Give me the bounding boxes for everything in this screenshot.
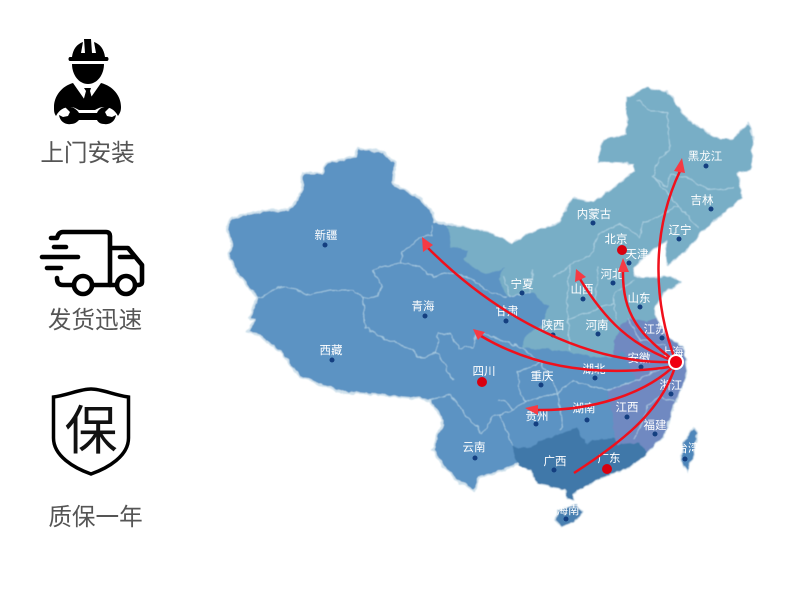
map: province labels: 浙江 [660, 379, 683, 392]
map: province labels: 辽宁 [668, 223, 692, 237]
icon: worker with wrench [54, 39, 121, 124]
arrow: to Gansu and Xinjiang [422, 237, 676, 362]
map: province labels: 台湾 [676, 441, 700, 455]
map: Taiwan [680, 428, 698, 472]
map of China [226, 88, 753, 527]
map: eastern provinces [608, 318, 687, 453]
arrow: to Heilongjiang [658, 158, 685, 362]
arrow: to Guangdong and Guangxi [574, 364, 676, 473]
map: province labels: 安徽 [628, 351, 651, 365]
map: province labels: 陕西 [542, 318, 564, 332]
map: province labels: 山西 [570, 283, 594, 296]
map: province labels: 西藏 [320, 344, 343, 357]
map: northern provinces [447, 88, 753, 358]
heading: 质保一年: 质保一年 [48, 504, 143, 531]
map: province labels: 吉林 [690, 193, 714, 207]
map: province labels [314, 150, 723, 517]
map: province capital dots [322, 164, 714, 522]
map: province labels: 河北 [600, 268, 624, 281]
map: province labels: 湖北 [582, 362, 606, 376]
map: province labels: 贵州 [526, 410, 548, 423]
map: province labels: 宁夏 [510, 277, 534, 291]
map: province labels: 湖南 [572, 401, 596, 415]
map: province labels: 青海 [412, 299, 435, 313]
map: province labels: 广东 [598, 452, 620, 465]
map: land regions [226, 88, 753, 527]
map: province labels: 内蒙古 [577, 207, 611, 221]
map: Shanghai origin hub [668, 354, 684, 370]
heading: 上门安装: 上门安装 [40, 140, 135, 167]
map: province labels: 新疆 [314, 228, 338, 242]
map: province labels: 江西 [616, 401, 638, 414]
map: province labels: 重庆 [530, 369, 554, 383]
map: province borders [257, 100, 733, 447]
map: province labels: 北京 [604, 232, 628, 246]
map: province labels: 海南 [556, 503, 580, 517]
map: province labels: 天津 [626, 248, 648, 261]
map: province labels: 甘肃 [496, 305, 518, 318]
map: province labels: 山东 [628, 292, 650, 305]
arrow: to Shanxi [575, 269, 676, 362]
icon: warranty shield: 保 [64, 389, 118, 465]
map: province labels: 四川 [472, 365, 496, 378]
icon: delivery truck [42, 232, 142, 294]
map: province labels: 上海 [660, 345, 684, 359]
map: province labels: 江苏 [644, 323, 666, 336]
map: province labels: 福建 [644, 418, 667, 432]
map: province labels: 黑龙江 [688, 150, 723, 163]
map: Guangxi and Guangdong [512, 428, 647, 500]
arrow: to Guizhou [525, 364, 676, 415]
icon: warranty shield [54, 389, 128, 474]
arrow: to Qinghai [473, 329, 676, 371]
map: province labels: 河南 [586, 318, 608, 332]
map: province labels: 广西 [544, 455, 566, 468]
arrow: to Beijing [618, 258, 676, 362]
map: red warehouse markers [477, 245, 627, 474]
map: country silhouette [226, 88, 753, 500]
heading: 发货迅速: 发货迅速 [48, 307, 142, 334]
map: Hainan [555, 504, 582, 527]
map: province labels: 云南 [462, 440, 486, 454]
